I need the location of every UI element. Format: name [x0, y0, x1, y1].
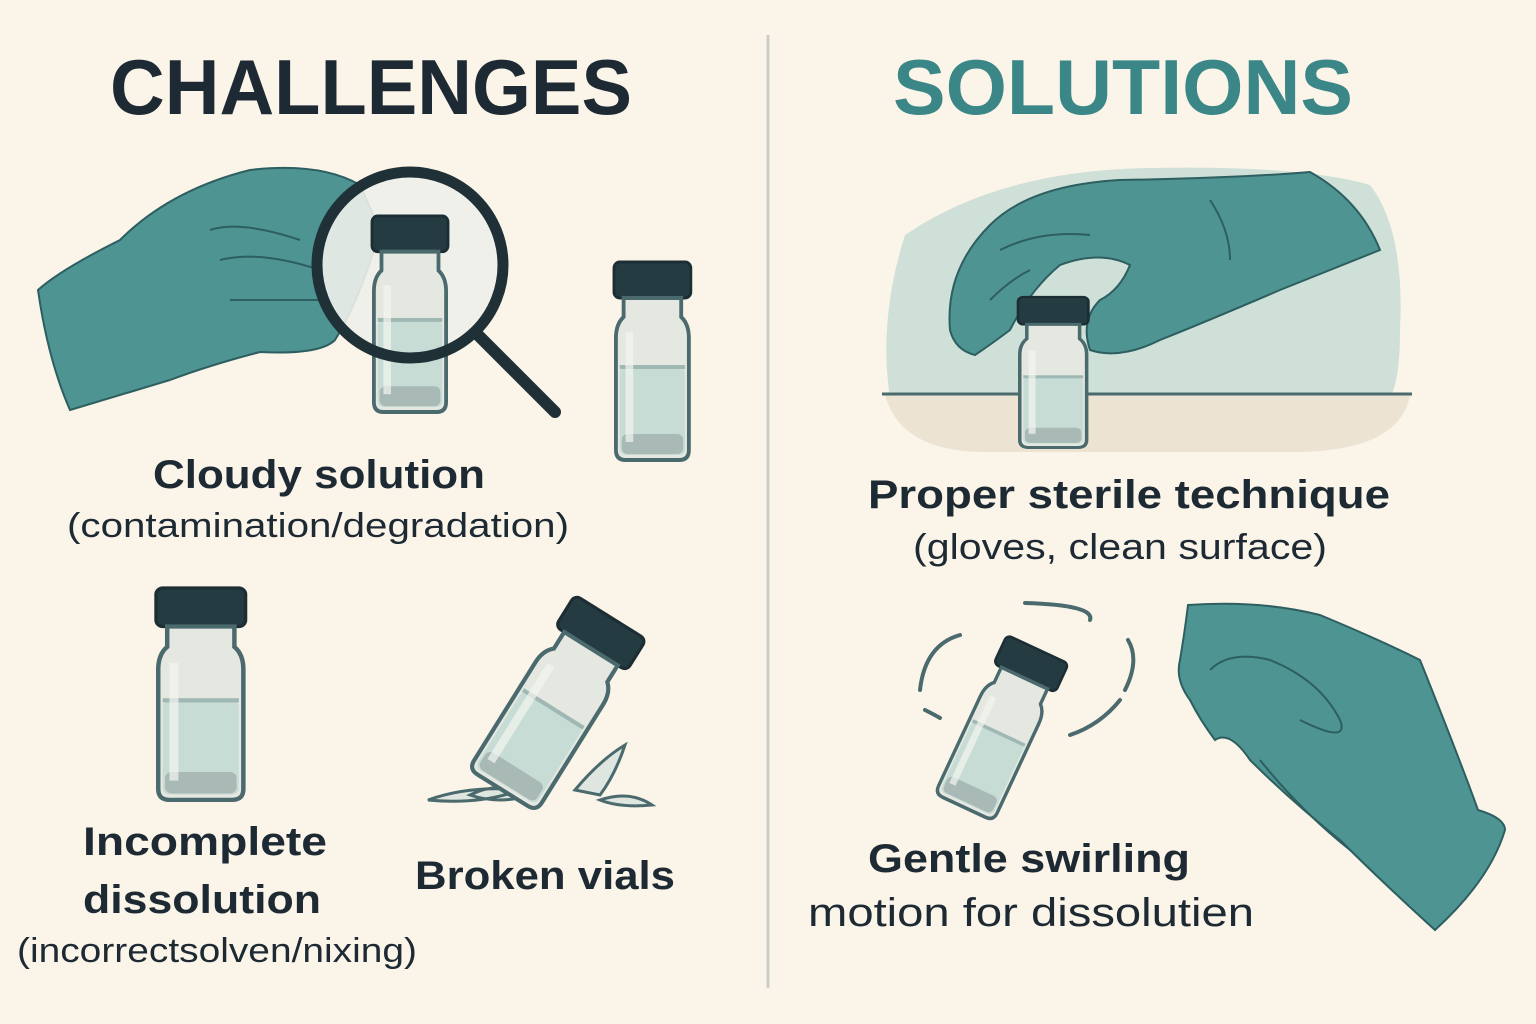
label: cloudy solution	[67, 453, 569, 545]
label: cloudy solution: (contamination/degradation)	[67, 507, 569, 545]
illustration: swirling vial	[920, 603, 1133, 822]
icon: vial incomplete	[156, 588, 246, 800]
label: proper sterile technique: (gloves, clean surface)	[913, 526, 1327, 567]
illustration: hand with magnifier	[38, 168, 555, 412]
illustration: sterile technique	[882, 168, 1412, 452]
icon: vial	[614, 262, 691, 460]
title: challenges: CHALLENGES	[110, 43, 632, 131]
illustration: glove swirling	[1179, 604, 1505, 930]
title: solutions: SOLUTIONS	[893, 43, 1353, 131]
label: broken vials: Broken vials	[415, 854, 675, 898]
label: incomplete dissolution: (incorrectsolven/nixing)	[17, 932, 417, 970]
icon: broken vial	[428, 595, 652, 812]
label: proper sterile technique: Proper sterile technique	[868, 473, 1390, 517]
label: incomplete dissolution: Incomplete	[83, 820, 327, 864]
label: proper sterile technique	[868, 473, 1390, 567]
label: gentle swirling: Gentle swirling	[868, 837, 1190, 881]
label: gentle swirling: motion for dissolutien	[808, 891, 1254, 935]
label: cloudy solution: Cloudy solution	[153, 453, 485, 497]
label: incomplete dissolution	[17, 820, 417, 970]
label: incomplete dissolution: dissolution	[83, 878, 321, 922]
label: gentle swirling	[808, 837, 1254, 935]
